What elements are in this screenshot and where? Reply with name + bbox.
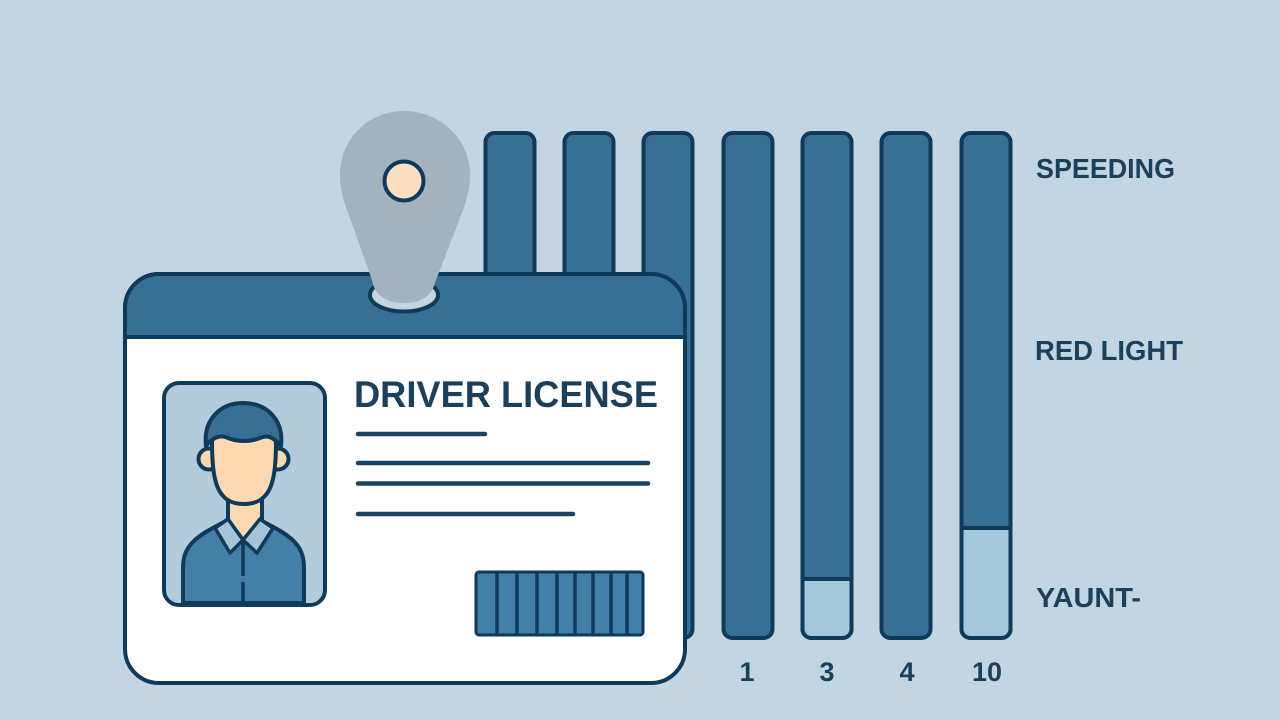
license card bbox=[125, 111, 685, 683]
category label: red light: RED LIGHT bbox=[1035, 335, 1183, 366]
category label: yaunt: YAUNT- bbox=[1036, 582, 1141, 613]
portrait: face bbox=[212, 429, 276, 504]
category label: speeding: SPEEDING bbox=[1036, 153, 1175, 184]
bar 5 with light segment bbox=[802, 133, 852, 638]
bar 3 bbox=[644, 133, 692, 638]
value 3: 3 bbox=[819, 657, 835, 687]
bar 2 bbox=[564, 133, 614, 638]
bar 6 bbox=[882, 133, 930, 638]
photo background bbox=[164, 383, 325, 605]
lanyard slot bbox=[370, 278, 438, 312]
portrait: neck bbox=[228, 498, 262, 540]
portrait: body bbox=[183, 520, 304, 603]
portrait: ears bbox=[198, 448, 288, 470]
card header band bbox=[125, 274, 685, 337]
value 10: 10 bbox=[972, 657, 1002, 687]
portrait: hair bbox=[206, 403, 281, 446]
photo frame with portrait bbox=[164, 383, 325, 605]
card text lines bbox=[358, 434, 648, 514]
bar 1 bbox=[486, 133, 534, 638]
value 1: 1 bbox=[739, 657, 755, 687]
bar 4 bbox=[724, 133, 772, 638]
bar chart bbox=[486, 133, 1010, 638]
portrait: collar bbox=[215, 519, 273, 553]
card title: DRIVER LICENSE bbox=[354, 374, 658, 415]
bar value labels bbox=[739, 657, 1002, 687]
portrait: shirt placket bbox=[241, 542, 245, 603]
value 4: 4 bbox=[899, 657, 915, 687]
barcode bbox=[476, 572, 643, 635]
bar 7 with light segment bbox=[962, 133, 1010, 638]
card body bbox=[125, 274, 685, 683]
pin bbox=[340, 111, 470, 303]
